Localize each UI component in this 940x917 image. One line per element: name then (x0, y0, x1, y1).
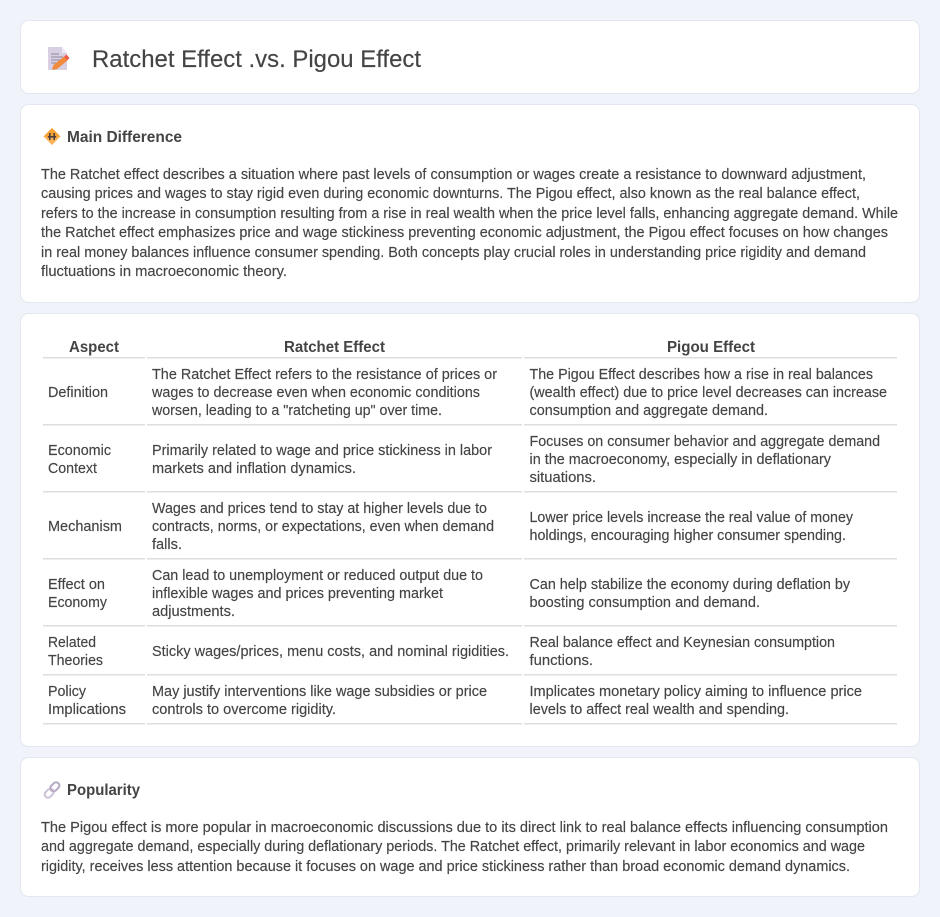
table row: effect on economy: Can lead to unemployment or reduced output due to (152, 568, 483, 584)
table header row (43, 339, 897, 358)
table row: mechanism: Mechanism (48, 519, 122, 535)
text block: main difference paragraph: refers to the increase in consumption resulting from a rise in real wealth when the price level falls, enhancing aggregate demand. While (41, 206, 898, 222)
table header row: Ratchet Effect (284, 339, 386, 356)
table row: related theories: Theories (48, 653, 103, 669)
table row: definition: Definition (48, 385, 108, 401)
icon: document with pencil (48, 47, 70, 70)
text block: main difference paragraph: the Ratchet effect emphasizes price and wage stickiness preventing economic adjustment, the Pigou effect focuses on how changes (41, 225, 888, 241)
table row: mechanism: Lower price levels increase the real value of money (530, 510, 854, 526)
text block: main difference paragraph (41, 167, 898, 280)
title: Ratchet Effect .vs. Pigou Effect (92, 46, 421, 73)
table row: definition: (wealth effect) due to price level decreases can increase (530, 385, 887, 401)
panel: popularity (20, 758, 920, 896)
table row: policy implications: Implicates monetary policy aiming to influence price (530, 684, 862, 700)
table row: definition: The Pigou Effect describes how a rise in real balances (530, 367, 873, 383)
table row: definition: consumption and aggregate demand. (530, 403, 768, 419)
table header row: Pigou Effect (667, 339, 756, 356)
table row: economic context: Economic (48, 443, 111, 459)
panel: comparison table (20, 314, 920, 746)
table row: economic context: situations. (530, 470, 596, 486)
table row: economic context: Primarily related to wage and price stickiness in labor (152, 443, 492, 459)
table row: mechanism: holdings, encouraging higher consumer spending. (530, 528, 846, 544)
table row: economic context: Context (48, 461, 97, 477)
text block: popularity paragraph: rigidity, receives less attention because it focuses on wage and price stickiness rather than broad economic demand dynamics. (41, 859, 850, 875)
table row: mechanism: contracts, norms, or expectations, even when demand (152, 519, 494, 535)
heading: main difference: Main Difference (67, 129, 182, 146)
text block: main difference paragraph: causing prices and wages to stay rigid even during economic downturns. The Pigou effect, also known as the real balance effect, (41, 186, 860, 202)
table row: mechanism: Wages and prices tend to stay at higher levels due to (152, 501, 487, 517)
table row: economic context: Focuses on consumer behavior and aggregate demand (530, 434, 880, 450)
table row: policy implications: Policy (48, 684, 87, 700)
table row: definition: The Ratchet Effect refers to the resistance of prices or (152, 367, 497, 383)
text block: popularity paragraph: The Pigou effect is more popular in macroeconomic discussions due to its direct link to real balance effects influencing consumption (41, 820, 888, 836)
table row: policy implications: Implications (48, 702, 126, 718)
table row: policy implications: controls to overcome rigidity. (152, 702, 336, 718)
table header row: Aspect (69, 339, 120, 356)
table row: related theories: Related (48, 635, 96, 651)
panel: title header (20, 20, 920, 94)
heading: popularity: Popularity (67, 782, 140, 799)
table row: policy implications (43, 684, 897, 724)
table row: effect on economy: Can help stabilize the economy during deflation by (530, 577, 851, 593)
table row: definition (43, 367, 897, 426)
table row: economic context (43, 434, 897, 492)
panel: main difference (20, 104, 920, 302)
icon: chain link (43, 781, 61, 799)
table row: effect on economy (43, 568, 897, 626)
table row: related theories: Real balance effect and Keynesian consumption (530, 635, 835, 651)
text block: main difference paragraph: fluctuations in macroeconomic theory. (41, 264, 287, 280)
table row: policy implications: May justify interventions like wage subsidies or price (152, 684, 487, 700)
text block: main difference paragraph: The Ratchet effect describes a situation where past levels of consumption or wages create a resistance to downward adjustment, (41, 167, 866, 183)
table row: effect on economy: boosting consumption and demand. (530, 595, 760, 611)
table row: effect on economy: inflexible wages and prices preventing market (152, 586, 443, 602)
text block: popularity paragraph: and aggregate demand, especially during deflationary periods. The Ratchet effect, primarily relevant in labor economics and wage (41, 839, 865, 855)
table row: definition: worsen, leading to a "ratcheting up" over time. (151, 403, 442, 419)
table row: related theories (43, 635, 897, 676)
table row: related theories: functions. (530, 653, 593, 669)
table row: related theories: Sticky wages/prices, menu costs, and nominal rigidities. (152, 644, 509, 660)
table row: policy implications: levels to affect real wealth and spending. (530, 702, 789, 718)
table row: mechanism: falls. (152, 537, 182, 553)
table row: definition: wages to decrease even when economic conditions (151, 385, 480, 401)
icon: orange diamond (44, 128, 60, 145)
table row: effect on economy: Economy (48, 595, 108, 611)
table row: mechanism (43, 501, 897, 560)
table row: economic context: markets and inflation dynamics. (152, 461, 356, 477)
table row: economic context: in the macroeconomy, especially in deflationary (530, 452, 832, 468)
text block: main difference paragraph: in real money balances influence consumer spending. Both concepts play crucial roles in understanding price rigidity and demand (41, 245, 866, 261)
table row: effect on economy: adjustments. (152, 604, 235, 620)
table row: effect on economy: Effect on (48, 577, 105, 593)
text block: popularity paragraph (41, 820, 888, 875)
